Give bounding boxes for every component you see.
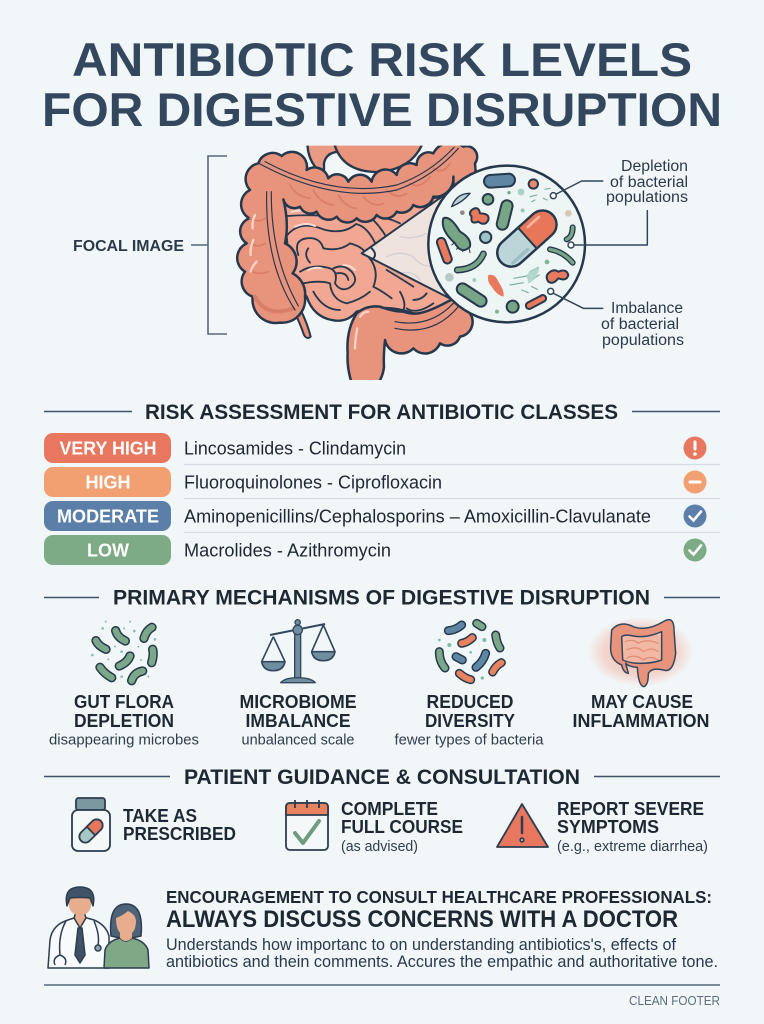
appendix — [295, 310, 311, 338]
callout: imbalance: populations — [602, 332, 684, 349]
capsule — [492, 205, 562, 272]
guidance: report severe symptoms — [497, 798, 708, 855]
guidance: complete full course: (as advised) — [341, 839, 418, 855]
bacteria — [436, 173, 573, 313]
title — [42, 33, 722, 136]
mechanism: reduced diversity: fewer types of bacteria — [394, 732, 544, 748]
doctor — [48, 887, 109, 968]
mechanism: gut flora depletion: DEPLETION — [74, 711, 174, 731]
panel: risk table — [44, 433, 720, 565]
mechanism: gut flora depletion — [49, 621, 199, 748]
callout: depletion — [606, 158, 688, 206]
callout: imbalance: Imbalance — [611, 300, 683, 317]
icon: fewer bacteria — [438, 623, 501, 680]
heading: risk assessment: RISK ASSESSMENT FOR ANTIBIOTIC CLASSES — [145, 401, 618, 424]
guidance: complete full course: FULL COURSE — [341, 816, 463, 837]
row: very high — [44, 433, 706, 463]
consultation text block: Understands how importanc to on understanding antibiotics's, effects of — [166, 936, 676, 954]
mechanism: reduced diversity — [394, 623, 544, 748]
stomach — [306, 146, 423, 174]
row: moderate — [44, 501, 706, 531]
consultation text block — [166, 887, 718, 971]
row: low — [44, 535, 706, 565]
icon: doctor and patient — [48, 887, 149, 968]
consultation text block: ENCOURAGEMENT TO CONSULT HEALTHCARE PROFESSIONALS: — [166, 887, 712, 907]
focal image label with bracket: FOCAL IMAGE — [73, 238, 184, 255]
heading: mechanisms: PRIMARY MECHANISMS OF DIGESTIVE DISRUPTION — [113, 586, 650, 610]
guidance: complete full course: COMPLETE — [341, 798, 438, 819]
patient — [104, 904, 149, 968]
callout: depletion: Depletion — [621, 158, 688, 175]
consultation text block: ALWAYS DISCUSS CONCERNS WITH A DOCTOR — [166, 906, 678, 933]
row: moderate: MODERATE — [57, 506, 159, 526]
guidance: complete full course — [286, 798, 463, 855]
title: ANTIBIOTIC RISK LEVELS — [72, 33, 692, 86]
mechanism: microbiome imbalance: IMBALANCE — [246, 711, 350, 731]
large intestine — [237, 142, 478, 383]
row: high: Fluoroquinolones - Ciprofloxacin — [184, 472, 442, 492]
faint microbes — [445, 189, 572, 314]
callout: depletion: of bacterial — [610, 174, 688, 191]
footer: CLEAN FOOTER — [629, 994, 720, 1008]
guidance: report severe symptoms: REPORT SEVERE — [557, 798, 704, 819]
mechanism: inflammation: MAY CAUSE — [591, 692, 693, 712]
magnifier cone — [362, 193, 455, 301]
icon: warning triangle — [497, 804, 548, 847]
row: low: Macrolides - Azithromycin — [184, 540, 391, 560]
colon shading and bands — [250, 147, 458, 348]
guidance: take as prescribed — [72, 798, 236, 851]
row: moderate: Aminopenicillins/Cephalosporins – Amoxicillin-Clavulanate — [184, 506, 651, 526]
guidance: take as prescribed: TAKE AS — [123, 805, 197, 826]
title: FOR DIGESTIVE DISRUPTION — [42, 83, 722, 136]
callout: imbalance — [601, 300, 684, 349]
consultation text block: antibiotics and thein comments. Accures the empathic and authoritative tone. — [166, 953, 718, 971]
row: very high: VERY HIGH — [60, 438, 156, 458]
callout: depletion: populations — [606, 189, 688, 206]
mechanism: reduced diversity: DIVERSITY — [425, 711, 515, 731]
icon: unbalanced scale — [262, 620, 335, 683]
icon: disappearing microbes — [91, 621, 156, 681]
mechanism: gut flora depletion: disappearing microbes — [49, 732, 199, 748]
mechanism: microbiome imbalance — [240, 620, 356, 748]
callout: imbalance: of bacterial — [601, 316, 679, 333]
illustration: intestines — [237, 140, 478, 383]
guidance: report severe symptoms: (e.g., extreme diarrhea) — [557, 839, 708, 855]
heading: patient guidance: PATIENT GUIDANCE & CONSULTATION — [184, 766, 580, 789]
mechanism: inflammation — [572, 617, 710, 731]
focal image label with bracket — [73, 156, 227, 334]
mechanism: reduced diversity: REDUCED — [426, 692, 514, 712]
row: high — [44, 467, 706, 497]
icon: inflamed colon — [588, 617, 693, 687]
mechanism: gut flora depletion: GUT FLORA — [74, 692, 174, 712]
illustration: magnified bacteria circle with capsule — [428, 166, 647, 322]
icon: pill bottle — [72, 798, 110, 851]
guidance: report severe symptoms: SYMPTOMS — [557, 816, 659, 837]
mechanism: microbiome imbalance: MICROBIOME — [240, 692, 356, 712]
small intestine — [283, 197, 460, 321]
row: very high: Lincosamides - Clindamycin — [184, 438, 406, 458]
mechanism: microbiome imbalance: unbalanced scale — [242, 732, 354, 748]
guidance: take as prescribed: PRESCRIBED — [123, 823, 236, 844]
mechanism: inflammation: INFLAMMATION — [572, 711, 710, 731]
icon: calendar check — [286, 800, 328, 850]
callout leader lines — [548, 181, 647, 308]
row: high: HIGH — [86, 472, 130, 492]
row: low: LOW — [87, 540, 129, 560]
